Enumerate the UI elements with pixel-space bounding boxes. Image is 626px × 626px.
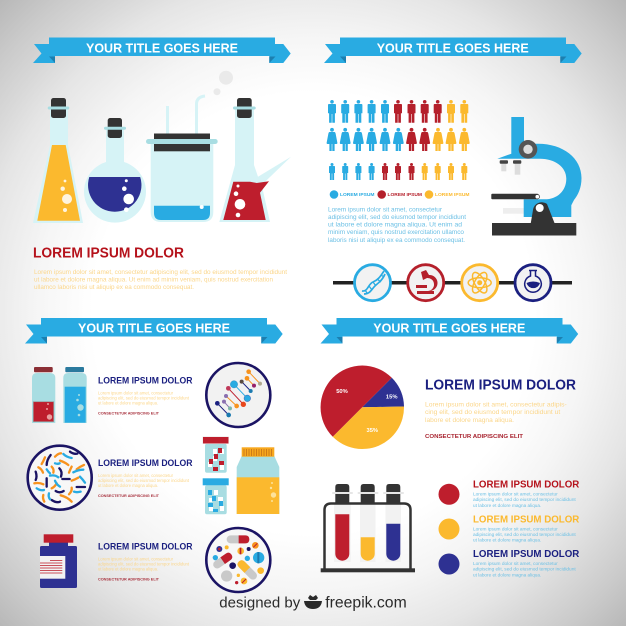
icon: pill jars: [203, 437, 279, 514]
legend item: yellow: LOREM IPSUM DOLOR: [473, 514, 580, 526]
legend item: yellow: adipiscing elit, sed do eiusmod tempor incididunt: [473, 532, 576, 537]
text block: flasks description: [34, 269, 287, 291]
text block: item one: ut labore et dolore magna aliqua.: [98, 400, 158, 406]
text block: pie description: [425, 377, 576, 440]
text block: item two: [98, 458, 193, 498]
legend item: red: ut labore et dolore magna aliqua.: [473, 503, 541, 508]
legend item: red: adipiscing elit, sed do eiusmod tempor incididunt: [473, 497, 576, 502]
legend item: red: [438, 479, 580, 508]
legend item: yellow: [438, 514, 580, 543]
banner: top right: YOUR TITLE GOES HERE: [377, 41, 529, 55]
footer: designed by freepik: freepik.com: [325, 595, 407, 612]
text block: item three: CONSECTETUR ADIPISCING ELIT: [98, 578, 160, 582]
banner: bottom left: YOUR TITLE GOES HERE: [78, 322, 230, 336]
text block: item two: Lorem ipsum dolor sit amet, consectetur: [98, 473, 174, 478]
text block: flasks description: ullamco laboris nisi ut aliquip ex ea commodo consequat.: [34, 284, 194, 291]
icon: test tube rack: [321, 484, 415, 572]
icon: yellow conical flask: [33, 98, 83, 223]
text block: pie description: Lorem ipsum dolor sit amet, consectetur adipis-: [425, 401, 567, 408]
text block: item one: LOREM IPSUM DOLOR: [98, 376, 193, 386]
text block: flasks description: ut labore et dolore magna aliqua. Ut enim ad minim veniam, quis nostrud exercitation: [34, 277, 273, 284]
text block: item three: [98, 542, 193, 582]
chart: pie: 50%: [336, 389, 348, 395]
chart: pie: [321, 366, 404, 449]
text block: people description: [328, 206, 466, 244]
text block: item one: [98, 376, 193, 416]
text block: people description: Lorem ipsum dolor sit amet, consectetur: [328, 206, 443, 214]
text block: item one: adipiscing elit, sed do eiusmod tempor incididunt: [98, 396, 190, 400]
icon: microscope: [491, 117, 582, 236]
footer: designed by freepik: designed by: [219, 596, 301, 612]
text block: item two: LOREM IPSUM DOLOR: [98, 458, 193, 468]
text block: flasks description: Lorem ipsum dolor sit amet, consectetur adipiscing elit, sed do eiusmod tempor incididunt: [34, 269, 287, 276]
icon: two vials: [32, 367, 87, 423]
banner: top left: YOUR TITLE GOES HERE: [86, 41, 238, 55]
chart: pie: 35%: [366, 428, 378, 434]
icon: bacteria petri dish: [28, 446, 92, 510]
icon: beaker with tubes and steam: [146, 71, 233, 222]
text block: pie description: labore et dolore magna aliqua.: [425, 417, 514, 424]
banner: bottom right: YOUR TITLE GOES HERE: [373, 322, 525, 336]
text block: people description: laboris nisi ut aliquip ex ea commodo consequat.: [328, 237, 465, 244]
chart: people pictogram: [327, 100, 470, 180]
icon: dna badge: [354, 265, 390, 301]
text block: pie description: CONSECTETUR ADIPISCING ELIT: [425, 434, 524, 440]
text block: people description: adipiscing elit, sed do eiusmod tempor incididunt: [328, 214, 466, 221]
text block: people description: ut labore et dolore magna aliqua. Ut enim ad: [328, 222, 462, 229]
legend: LOREM IPSUM: [340, 192, 374, 198]
legend item: navy: ut labore et dolore magna aliqua.: [473, 572, 541, 577]
legend item: yellow: Lorem ipsum dolor sit amet, consectetur: [473, 526, 558, 531]
text block: item three: LOREM IPSUM DOLOR: [98, 542, 193, 552]
legend item: yellow: ut labore et dolore magna aliqua.: [473, 538, 541, 543]
banner: bottom left: [25, 318, 283, 344]
icon: microscope badge: [408, 265, 444, 301]
banner: top right: [324, 38, 582, 63]
text block: item two: CONSECTETUR ADIPISCING ELIT: [98, 494, 160, 498]
icon: pills petri dish: [206, 528, 270, 592]
banner: top left: [33, 38, 291, 63]
icon: flask badge: [515, 265, 551, 301]
icon: navy medicine bottle: [40, 534, 77, 588]
legend: LOREM IPSUM: [388, 192, 422, 198]
legend: LOREM IPSUM: [435, 192, 470, 198]
icon: red flask with spout: [219, 98, 291, 222]
text block: item three: Lorem ipsum dolor sit amet, consectetur: [98, 556, 174, 562]
icon: atom badge: [462, 265, 498, 301]
legend item: navy: [438, 548, 580, 577]
text block: item three: adipiscing elit, sed do eiusmod tempor incididunt: [98, 562, 190, 566]
text block: item three: ut labore et dolore magna aliqua.: [98, 566, 158, 572]
chart: pie: 15%: [386, 394, 398, 400]
banner: bottom right: [320, 318, 578, 344]
legend item: red: LOREM IPSUM DOLOR: [473, 479, 580, 491]
icon: blue round flask: [84, 118, 146, 223]
footer: designed by freepik: [219, 595, 407, 612]
legend: [330, 190, 470, 199]
text block: pie description: cing elit, sed do eiusmod tempor incididunt ut: [425, 409, 560, 416]
text block: item two: ut labore et dolore magna aliqua.: [98, 483, 158, 488]
text block: people description: minim veniam, quis nostrud exercitation ullamco: [328, 229, 464, 236]
legend item: red: Lorem ipsum dolor sit amet, consectetur: [473, 492, 558, 496]
heading: lorem ipsum red: LOREM IPSUM DOLOR: [33, 245, 184, 261]
legend item: navy: Lorem ipsum dolor sit amet, consectetur: [473, 561, 558, 566]
icon row: science badges: [333, 265, 572, 301]
text block: pie description: LOREM IPSUM DOLOR: [425, 377, 576, 393]
legend item: navy: adipiscing elit, sed do eiusmod tempor incididunt: [473, 567, 576, 572]
text block: item two: adipiscing elit, sed do eiusmod tempor incididunt: [98, 478, 190, 483]
text block: item one: CONSECTETUR ADIPISCING ELIT: [98, 412, 160, 416]
text block: item one: Lorem ipsum dolor sit amet, consectetur: [98, 390, 174, 396]
icon: dna petri dish: [206, 363, 270, 427]
legend item: navy: LOREM IPSUM DOLOR: [473, 548, 580, 560]
